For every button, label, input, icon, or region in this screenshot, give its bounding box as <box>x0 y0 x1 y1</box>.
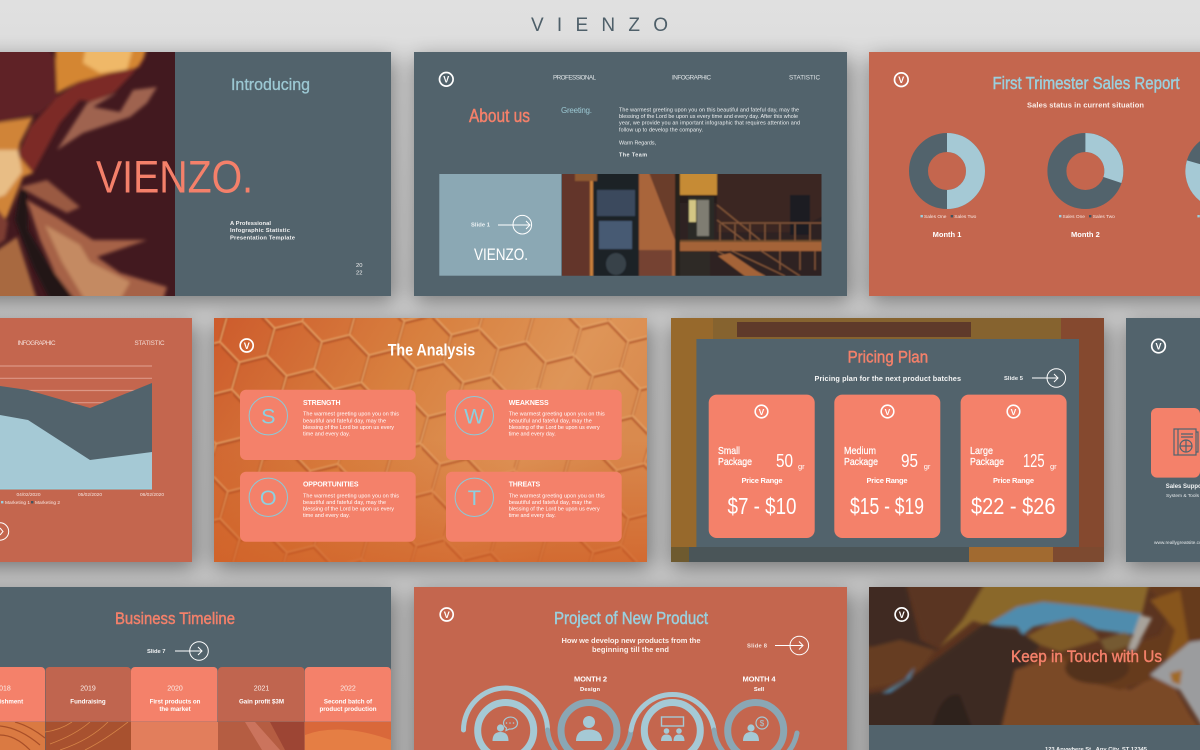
arrow <box>498 215 532 234</box>
card: opportunities <box>240 472 416 542</box>
year <box>356 263 362 276</box>
milestone: 2022 <box>305 667 391 722</box>
body: blessing of the Lord be upon us every <box>303 425 394 431</box>
price: $7 - $10 <box>728 493 796 519</box>
icon: presentation <box>661 717 684 741</box>
logo: V <box>1011 407 1017 417</box>
logo <box>1007 405 1020 418</box>
legend: month 2 <box>1059 214 1115 220</box>
description: Gain profit $3M <box>239 699 284 706</box>
year: 2022 <box>340 686 356 692</box>
price: $22 - $26 <box>971 493 1056 519</box>
body text <box>619 108 800 158</box>
step ring 3 <box>644 702 700 750</box>
navigation <box>553 74 820 82</box>
title: WEAKNESS <box>509 400 549 407</box>
body: The warmest greeting upon you on this <box>509 412 605 418</box>
letter badge <box>249 396 288 435</box>
chart legend <box>1 500 60 506</box>
teal panel <box>696 339 1079 547</box>
title: OPPORTUNITIES <box>303 482 359 488</box>
tagline: Infographic Statistic <box>230 228 291 234</box>
subheading <box>562 636 700 654</box>
weight: gr <box>924 462 931 471</box>
letter badge: T <box>468 486 481 510</box>
tagline <box>230 221 296 242</box>
brand wordmark: VIENZO. <box>96 152 253 202</box>
teal footer <box>869 725 1200 750</box>
year: 20 <box>356 263 362 269</box>
description <box>319 699 377 713</box>
milestone: 2021 <box>218 667 304 722</box>
chart legend: Marketing 1 <box>5 500 30 506</box>
label: month 2 <box>574 674 607 693</box>
body: The warmest greeting upon you on this <box>509 493 605 499</box>
letter badge <box>249 478 288 516</box>
body <box>509 412 605 438</box>
logo <box>755 405 768 418</box>
logo <box>240 339 253 352</box>
slide: project of new product <box>414 587 847 750</box>
date axis: 05/02/2020 <box>78 492 102 498</box>
date axis: 06/02/2020 <box>140 492 164 498</box>
panel <box>0 587 391 750</box>
icon: person with coin: $ <box>760 719 765 728</box>
light blue card <box>439 174 561 276</box>
description: product production <box>319 706 377 713</box>
greeting: Greeting. <box>561 106 592 115</box>
body: blessing of the Lord be upon us every <box>303 506 394 512</box>
logo: V <box>899 610 905 620</box>
package name: Small <box>718 445 740 457</box>
logo: V <box>898 75 904 85</box>
body: blessing of the Lord be upon us every <box>509 506 600 512</box>
slide: first trimester sales report <box>869 52 1200 296</box>
slide label: Slide 1 <box>471 222 491 228</box>
logo <box>440 608 453 621</box>
legend: month 1: Sales One <box>924 214 947 220</box>
body text: Warm Regards, <box>619 141 656 147</box>
logo <box>1152 339 1165 353</box>
date axis <box>16 492 164 498</box>
title: THREATS <box>509 482 541 488</box>
slide: pricing plan <box>671 318 1104 562</box>
body: time and every day. <box>509 432 556 438</box>
date axis: 04/02/2020 <box>16 492 41 498</box>
description: First products on <box>150 699 201 706</box>
letter badge <box>455 478 493 516</box>
logo <box>440 72 453 86</box>
icon: document with globe <box>1174 429 1198 455</box>
price range label: Price Range <box>866 476 908 485</box>
letter badge: W <box>464 404 485 428</box>
background photo <box>671 318 1104 562</box>
description: Second batch of <box>324 699 373 706</box>
slide label: Slide 7 <box>147 649 166 655</box>
step ring 2 <box>561 702 617 750</box>
card: large package <box>961 395 1067 538</box>
legend: month 2: Sales One <box>1062 214 1085 220</box>
panel <box>1126 318 1200 562</box>
navigation: INFOGRAPHIC <box>18 340 56 347</box>
logo: V <box>885 407 891 417</box>
connecting arcs <box>464 688 797 750</box>
heading: Keep in Touch with Us <box>1011 647 1162 666</box>
package name: Package <box>844 456 878 468</box>
weight <box>901 450 931 471</box>
body: time and every day. <box>303 432 350 438</box>
slide: keep in touch <box>860 580 1200 750</box>
package name <box>718 445 752 468</box>
year: 22 <box>356 270 362 276</box>
slide: about us <box>414 52 847 296</box>
logo <box>894 73 908 86</box>
donut: month 1 <box>918 142 976 200</box>
weight: 95 <box>901 450 918 471</box>
panel <box>0 318 192 562</box>
slide: sales support <box>1126 318 1200 562</box>
body: beautiful and fateful day, may the <box>509 500 592 506</box>
body <box>303 412 399 438</box>
tagline: A Professional <box>230 221 271 227</box>
canyon photo <box>0 40 175 300</box>
body text: follow up to develop the company. <box>619 127 703 133</box>
body: The warmest greeting upon you on this <box>303 493 399 499</box>
panel <box>869 52 1200 296</box>
brand title: VIENZO <box>531 15 668 36</box>
honeycomb background <box>214 318 647 562</box>
letter badge: O <box>260 486 277 510</box>
card: weakness <box>446 390 622 460</box>
label: month 2: Design <box>580 687 600 693</box>
logo: V <box>443 75 449 85</box>
weight: gr <box>798 462 805 471</box>
legend: month 1 <box>920 214 977 220</box>
icon: person <box>576 716 602 741</box>
package name: Medium <box>844 445 876 457</box>
slide label: Slide 8 <box>747 644 768 650</box>
price: $15 - $19 <box>850 493 924 519</box>
price range label: Price Range <box>993 476 1034 485</box>
legend: month 3 <box>1197 215 1200 217</box>
weight: 50 <box>776 450 793 471</box>
icon: person with speech bubble <box>492 717 517 741</box>
navigation: INFOGRAPHIC <box>672 74 711 82</box>
body: beautiful and fateful day, may the <box>303 418 386 424</box>
package name: Large <box>970 445 993 457</box>
label: month 4: Sell <box>754 687 765 693</box>
body: The warmest greeting upon you on this <box>303 412 399 418</box>
package name: Package <box>970 456 1004 468</box>
logo: V <box>244 341 250 351</box>
body: beautiful and fateful day, may the <box>303 500 386 506</box>
panel <box>414 52 847 296</box>
teal panel <box>175 52 391 296</box>
canyon photo <box>869 587 1200 725</box>
year: 2019 <box>80 686 96 692</box>
service caption: System & Tools <box>1166 493 1200 499</box>
price range label: Price Range <box>742 476 782 485</box>
label: month 1: Month 1 <box>933 230 961 239</box>
body text: The Team <box>619 152 647 158</box>
label: month 2: Month 2 <box>1071 230 1100 239</box>
year: 2021 <box>254 686 269 692</box>
logo: V <box>1155 341 1162 351</box>
body <box>509 493 605 519</box>
card: medium package <box>834 395 940 538</box>
letter badge: S <box>261 404 275 428</box>
milestone: 2019 <box>46 667 131 722</box>
service card <box>1151 408 1200 478</box>
area chart <box>0 366 152 490</box>
body: blessing of the Lord be upon us every <box>509 425 600 431</box>
card: strength <box>240 390 416 460</box>
logo: V <box>759 407 765 417</box>
subheading: Pricing plan for the next product batches <box>814 374 961 383</box>
arrow <box>775 636 809 655</box>
donut: month 2 <box>1057 142 1114 200</box>
milestone: 2020 <box>131 667 218 722</box>
logo <box>895 608 908 621</box>
package name <box>970 445 1004 468</box>
navigation: PROFESSIONAL <box>553 74 596 82</box>
card: threats <box>446 472 622 542</box>
heading: Project of New Product <box>554 608 708 628</box>
weight: 125 <box>1023 450 1044 471</box>
package name <box>844 445 878 468</box>
step ring 1 <box>478 702 534 750</box>
slide: business timeline <box>0 587 391 750</box>
package name: Package <box>718 456 752 468</box>
step ring 4 <box>728 702 784 750</box>
card: small package <box>709 395 815 538</box>
heading: The Analysis <box>388 340 475 360</box>
arrow <box>175 642 208 660</box>
body <box>303 493 399 519</box>
chart legend: Marketing 2 <box>35 500 60 506</box>
year: 2020 <box>167 686 183 692</box>
navigation <box>18 340 165 347</box>
logo <box>881 405 894 418</box>
description: Fundraising <box>70 699 106 706</box>
body text: The warmest greeting upon you on this beautiful and fateful day, may the <box>619 108 799 114</box>
description: the market <box>159 706 191 713</box>
navigation: STATISTIC <box>789 74 820 82</box>
subheading: beginning till the end <box>592 645 669 654</box>
heading: About us: About us <box>469 106 530 126</box>
arrow <box>1032 369 1066 387</box>
milestone: 2018 <box>0 667 45 722</box>
subheading: Sales status in current situation <box>1027 101 1144 110</box>
wordmark: VIENZO. <box>474 245 528 264</box>
label: month 2: MONTH 2 <box>574 674 607 684</box>
logo: V <box>444 610 450 620</box>
body text: year, we provide you an important infographic that requires attention and <box>619 121 800 127</box>
body: time and every day. <box>509 513 556 519</box>
subheading: How we develop new products from the <box>562 636 700 645</box>
title: STRENGTH <box>303 400 340 407</box>
label: month 4 <box>742 674 776 693</box>
slide: area chart <box>0 318 192 562</box>
tagline: Presentation Template <box>230 236 296 242</box>
body: beautiful and fateful day, may the <box>509 418 592 424</box>
label: month 4: MONTH 4 <box>742 674 776 684</box>
body: time and every day. <box>303 513 350 519</box>
heading: Pricing Plan <box>848 348 928 366</box>
body text: blessing of the Lord be upon us every time and every day. After this whole <box>619 114 798 120</box>
arrow <box>0 523 9 540</box>
building photo <box>562 174 822 276</box>
donut: month 3 <box>1195 142 1200 200</box>
legend: month 2: Sales Two <box>1093 214 1115 220</box>
legend: month 1: Sales Two <box>954 214 977 220</box>
slide: SWOT analysis <box>214 318 647 562</box>
heading: Business Timeline <box>115 609 235 628</box>
navigation: STATISTIC <box>134 340 165 347</box>
timeline photos <box>0 722 391 750</box>
letter badge <box>455 396 493 435</box>
slide: introducing cover <box>0 40 391 300</box>
panel <box>414 587 847 750</box>
heading: Introducing: Introducing <box>231 75 310 94</box>
slide label: Slide 5 <box>1004 376 1024 382</box>
weight: gr <box>1050 462 1057 471</box>
description <box>150 699 201 713</box>
